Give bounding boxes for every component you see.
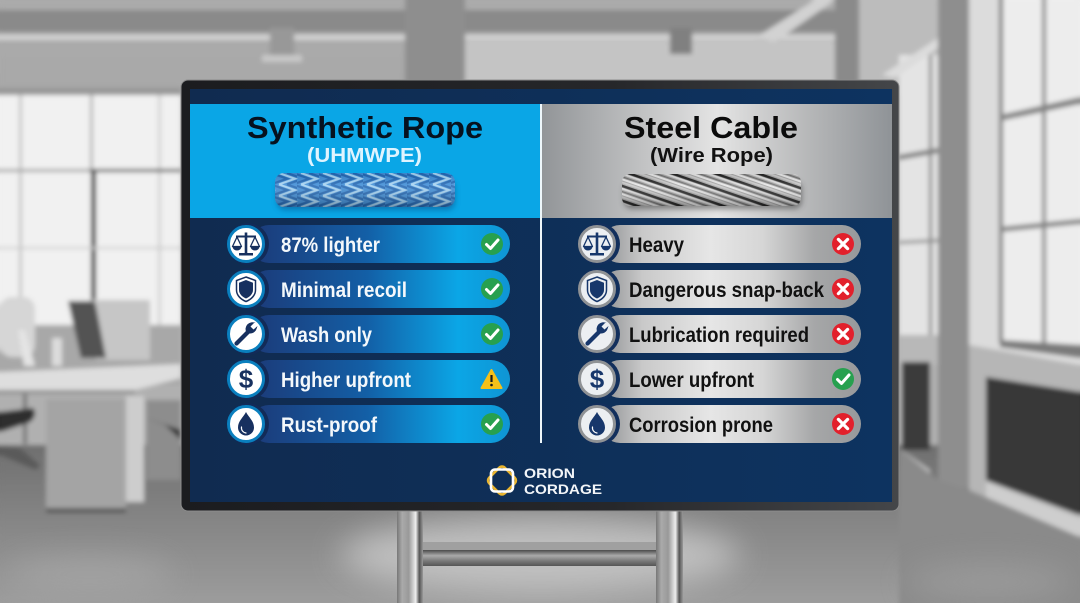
row: Rust-proof: Rust-proof (281, 414, 378, 437)
image: twisted steel cable (622, 174, 802, 209)
heading: Synthetic Rope: Synthetic Rope (247, 110, 483, 145)
heading: Steel Cable: Steel Cable (624, 110, 798, 145)
divider between columns (540, 104, 542, 443)
row: Lower upfront: $ (590, 364, 605, 394)
row: Dangerous snap-back (578, 268, 861, 310)
icon: warning triangle (482, 370, 502, 388)
wordmark: ORION (524, 465, 575, 481)
row: Lubrication required (578, 313, 861, 355)
panel: steel cable rows (578, 223, 861, 445)
panel: synthetic rope rows (227, 223, 510, 445)
wordmark (524, 465, 602, 497)
row: Wash only: Wash only (281, 324, 372, 347)
floor: soft concrete highlights (5, 517, 1075, 600)
row: Corrosion prone (578, 403, 861, 445)
screen background (190, 89, 892, 502)
image: braided blue rope (275, 173, 455, 210)
row: Higher upfront (227, 358, 510, 400)
row: Rust-proof (227, 403, 510, 445)
logo: Orion Cordage (486, 465, 602, 497)
row: Heavy: Heavy (629, 234, 684, 257)
row: Wash only (227, 313, 510, 355)
row: Heavy (578, 223, 861, 265)
row: 87% lighter (227, 223, 510, 265)
row: Minimal recoil (227, 268, 510, 310)
wordmark: CORDAGE (524, 481, 602, 497)
row: Minimal recoil: Minimal recoil (281, 279, 407, 302)
row: Dangerous snap-back: Dangerous snap-back (629, 279, 824, 302)
row: Lower upfront (578, 358, 861, 400)
panel: synthetic rope header (190, 104, 540, 218)
stand: chrome legs and crossbar (397, 510, 683, 603)
monitor: display housing (181, 80, 899, 511)
icon: woven ring mark (486, 465, 518, 496)
subheading: Wire Rope: (Wire Rope) (650, 145, 773, 167)
row: Higher upfront: Higher upfront (281, 369, 411, 392)
subheading: UHMWPE: (UHMWPE) (307, 145, 422, 167)
panel: steel cable header (542, 104, 892, 218)
row: Corrosion prone: Corrosion prone (629, 414, 773, 437)
row: Higher upfront: $ (239, 364, 254, 394)
row: Lower upfront: Lower upfront (629, 369, 754, 392)
row: 87% lighter: 87% lighter (281, 234, 380, 257)
row: Lubrication required: Lubrication required (629, 324, 809, 347)
